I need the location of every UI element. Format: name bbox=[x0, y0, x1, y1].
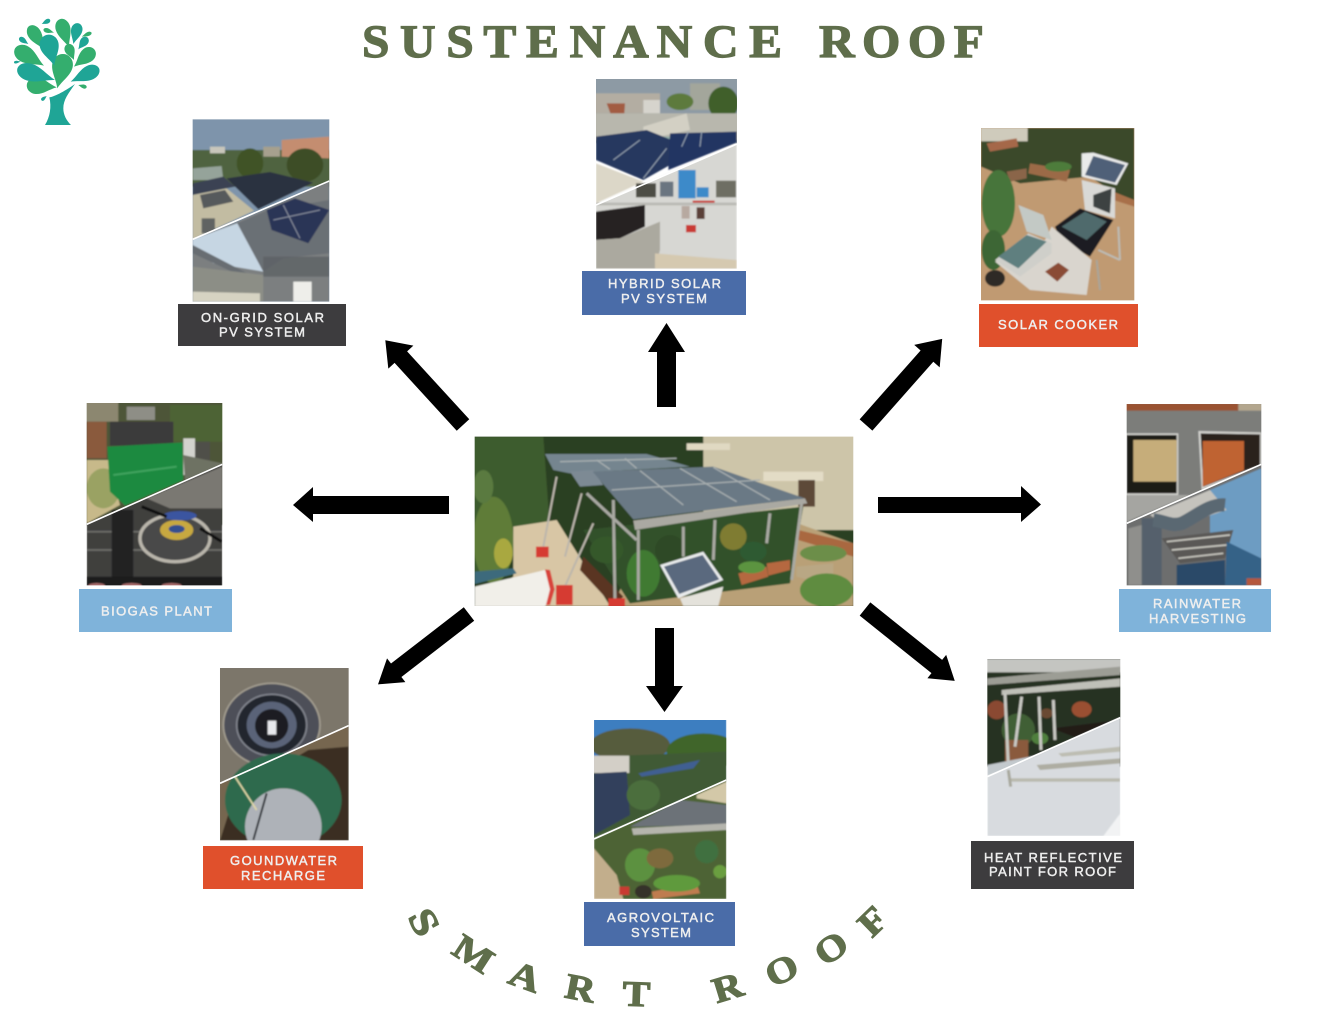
panel: rainwater harvesting bbox=[1119, 402, 1271, 632]
panel: agrovoltaic system bbox=[584, 718, 740, 946]
panel: on-grid solar bbox=[178, 117, 346, 346]
arrow: down bbox=[646, 628, 683, 712]
label: biogas plant: BIOGAS PLANT bbox=[101, 604, 212, 618]
arc text: smart roof: O bbox=[759, 946, 805, 996]
photo: open well bbox=[220, 668, 349, 840]
label: agrovoltaic system bbox=[584, 902, 735, 946]
label: rainwater harvesting: HARVESTING bbox=[1149, 611, 1246, 626]
label: rainwater harvesting bbox=[1119, 589, 1271, 632]
panel: heat reflective paint bbox=[971, 657, 1134, 889]
panel: groundwater recharge bbox=[203, 667, 363, 889]
label: solar cooker bbox=[979, 304, 1138, 347]
panel: hybrid solar bbox=[582, 77, 746, 315]
label: agrovoltaic system: AGROVOLTAIC bbox=[607, 910, 714, 925]
arc text: smart roof: S bbox=[400, 901, 449, 943]
arrow: down-left bbox=[369, 602, 478, 696]
label: hybrid solar bbox=[582, 271, 746, 315]
arc text: smart roof: M bbox=[445, 926, 501, 982]
label: heat reflective paint bbox=[971, 841, 1134, 889]
label: groundwater recharge: GOUNDWATER bbox=[230, 853, 337, 868]
label: groundwater recharge bbox=[203, 846, 363, 889]
arrow: up bbox=[648, 323, 685, 407]
photo: hybrid solar panels and inverter room bbox=[593, 77, 740, 270]
label: agrovoltaic system: SYSTEM bbox=[631, 925, 691, 940]
arc text: smart roof: T bbox=[622, 974, 651, 1015]
arrow: left bbox=[293, 487, 449, 522]
label: on-grid solar bbox=[178, 304, 346, 346]
center photo: solar panels over rooftop garden bbox=[470, 430, 860, 610]
label: rainwater harvesting: RAINWATER bbox=[1153, 596, 1241, 611]
photo: plants under solar panels bbox=[594, 720, 726, 899]
label: heat reflective paint: HEAT REFLECTIVE bbox=[984, 850, 1122, 865]
label: on-grid solar: PV SYSTEM bbox=[219, 324, 305, 340]
photo: filter tanks and rain pipe bbox=[1125, 402, 1265, 588]
label: heat reflective paint: PAINT FOR ROOF bbox=[989, 864, 1116, 879]
arc text: smart roof: O bbox=[807, 923, 856, 974]
photo: on-grid solar panels bbox=[190, 117, 333, 303]
panel: biogas plant bbox=[79, 402, 232, 632]
arc text: smart roof: R bbox=[707, 964, 749, 1011]
title: R O O F bbox=[819, 16, 984, 68]
label: biogas plant bbox=[79, 589, 232, 632]
arrow: down-right bbox=[856, 597, 964, 693]
label: solar cooker: SOLAR COOKER bbox=[998, 317, 1118, 332]
label: on-grid solar: ON-GRID SOLAR bbox=[201, 310, 324, 325]
arrows bbox=[293, 323, 1041, 712]
label: groundwater recharge: RECHARGE bbox=[241, 868, 325, 883]
arc text: smart roof bbox=[400, 899, 896, 1015]
title: S U S T E N A N C E bbox=[362, 16, 782, 68]
photo: biogas tank and burner bbox=[85, 402, 225, 588]
photo: white painted roof under frame bbox=[985, 657, 1122, 836]
photo: solar cookers on table bbox=[980, 127, 1137, 302]
panel: solar cooker bbox=[979, 127, 1138, 347]
arc text: smart roof: R bbox=[562, 966, 600, 1011]
arrow: right bbox=[878, 486, 1041, 522]
logo: tree bbox=[11, 17, 102, 125]
label: hybrid solar: HYBRID SOLAR bbox=[608, 276, 721, 291]
arc text: smart roof: A bbox=[504, 953, 547, 1001]
label: hybrid solar: PV SYSTEM bbox=[621, 291, 707, 306]
arrow: up-left bbox=[373, 329, 476, 436]
title bbox=[362, 16, 984, 68]
arrow: up-right bbox=[853, 328, 955, 436]
arc text: smart roof: F bbox=[850, 899, 896, 945]
